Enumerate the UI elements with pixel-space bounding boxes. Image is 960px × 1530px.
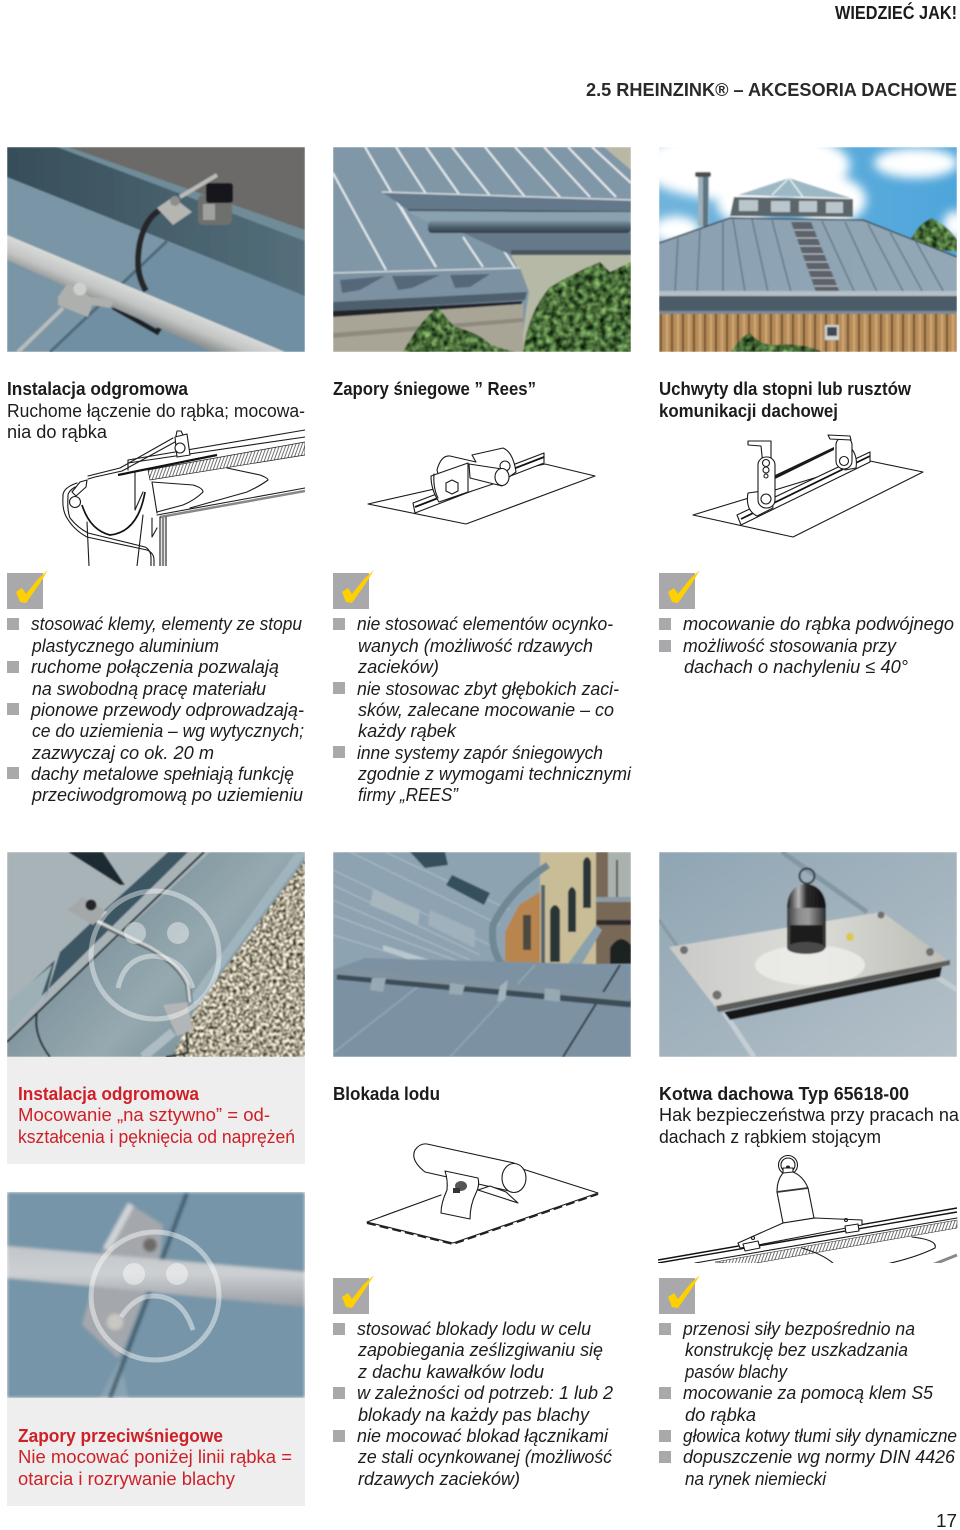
list: ice blocker: stosować blokady lodu w celu [357,1318,591,1339]
icon: check mark [7,570,48,609]
icon: check mark [333,1275,374,1314]
list: snow guards: wanych (możliwość rdzawych [358,635,593,656]
callout: wrong lightning installation [7,1057,305,1164]
list: ice blocker: z dachu kawałków lodu [357,1361,544,1382]
list: lightning installation: ruchome połączenia pozwalają [31,656,279,677]
photo: ice blocker on roof [333,852,631,1057]
list: ice blocker: rdzawych zacieków) [358,1468,520,1489]
list: snow guards: nie stosowac zbyt głębokich zaci- [357,678,619,699]
list: lightning installation: dachy metalowe spełniają funkcję [31,763,294,784]
list: snow guards: każdy rąbek [358,720,458,741]
list: lightning installation: ce do uziemienia – wg wytycznych; [32,720,304,741]
icon: check mark [659,570,700,609]
list: ice blocker: w zależności od potrzeb: 1 lub 2 [357,1382,614,1403]
icon: check mark [333,570,374,609]
list: step holders [659,613,954,677]
drawing: eaves section with gutter [63,430,305,566]
caption: lightning installation: Instalacja odgromowa [7,378,189,399]
section title: 2.5 RHEINZINK® – AKCESORIA DACHOWE [586,79,957,100]
caption: step holders [659,378,912,421]
list: roof anchor: pasów blachy [684,1361,789,1382]
list: ice blocker: blokady na każdy pas blachy [358,1404,591,1425]
list: roof anchor: konstrukcję bez uszkadzania [685,1339,908,1360]
icon: sad face [91,1232,219,1360]
caption: step holders: komunikacji dachowej [659,400,838,421]
list: ice blocker: ze stali ocynkowanej (możliwość [357,1446,613,1467]
list: step holders: mocowanie do rąbka podwójnego [683,613,954,634]
drawing: roof anchor section [658,1156,957,1265]
caption: step holders: Uchwyty dla stopni lub rusztów [659,378,912,399]
list: ice blocker: zapobiegania ześlizgiwaniu się [357,1339,603,1360]
photo: snow guards on roof [333,147,631,352]
photo: lightning clamp on seam [7,147,305,352]
list: snow guards: inne systemy zapór śniegowych [357,742,603,763]
caption: lightning installation [7,378,305,442]
callout: wrong snow guard: Nie mocować poniżej linii rąbka = [18,1446,292,1467]
list: lightning installation [7,613,304,805]
list: roof anchor: mocowanie za pomocą klem S5 [683,1382,934,1403]
list: lightning installation: plastycznego aluminium [31,635,219,656]
list: lightning installation: przeciwodgromową po uziemieniu [31,784,303,805]
callout: wrong lightning installation: Instalacja odgromowa [18,1083,200,1104]
caption: lightning installation: nia do rąbka [7,421,108,442]
list: lightning installation: stosować klemy, elementy ze stopu [31,613,302,634]
caption: roof anchor: dachach z rąbkiem stojącym [659,1126,881,1147]
list: step holders: dachach o nachyleniu ≤ 40° [684,656,908,677]
drawing: Rees snow guard [368,448,595,524]
list: snow guards: nie stosować elementów ocynko- [357,613,613,634]
callout: wrong snow guard [7,1398,305,1506]
list: snow guards: firmy „REES” [358,784,459,805]
drawing: ice blocker [367,1144,598,1244]
icon: sad face [91,891,219,1019]
photo: wrong snow guard with sad face [7,1192,305,1398]
caption: roof anchor: Hak bezpieczeństwa przy pracach na [659,1104,960,1125]
drawing: step holder [693,435,923,537]
list: ice blocker: nie mocować blokad łącznikami [357,1425,609,1446]
list: snow guards: zgodnie z wymogami technicznymi [357,763,632,784]
list: roof anchor [659,1318,957,1489]
list: ice blocker [333,1318,614,1489]
list: snow guards [333,613,632,805]
list: snow guards: zacieków) [357,656,439,677]
list: step holders: możliwość stosowania przy [683,635,898,656]
caption: roof anchor: Kotwa dachowa Typ 65618-00 [659,1083,909,1104]
list: snow guards: sków, zalecane mocowanie – co [358,699,614,720]
caption: roof anchor [659,1083,960,1147]
list: roof anchor: na rynek niemiecki [685,1468,827,1489]
caption: lightning installation: Ruchome łączenie do rąbka; mocowa- [7,400,305,421]
caption: Rees snow guards: Zapory śniegowe ” Rees” [333,378,536,399]
list: roof anchor: przenosi siły bezpośrednio na [682,1318,915,1339]
list: roof anchor: do rąbka [685,1404,756,1425]
photo: roof with walkway and skylight [659,147,957,352]
icon: check mark [659,1275,700,1314]
photo: roof anchor on plate [659,852,957,1057]
list: lightning installation: na swobodną pracę materiału [32,678,266,699]
callout: wrong lightning installation: kształcenia i pęknięcia od naprężeń [18,1126,295,1147]
callout: wrong snow guard: otarcia i rozrywanie blachy [18,1468,236,1489]
photo: rigid lightning connection with sad face [7,852,305,1057]
callout: wrong snow guard: Zapory przeciwśniegowe [18,1425,223,1446]
caption: ice blocker: Blokada lodu [333,1083,440,1104]
list: lightning installation: zazwyczaj co ok. 20 m [31,742,214,763]
callout: wrong lightning installation: Mocowanie „na sztywno” = od- [18,1104,270,1125]
list: lightning installation: pionowe przewody odprowadzają- [30,699,304,720]
list: roof anchor: dopuszczenie wg normy DIN 4426 [683,1446,956,1467]
